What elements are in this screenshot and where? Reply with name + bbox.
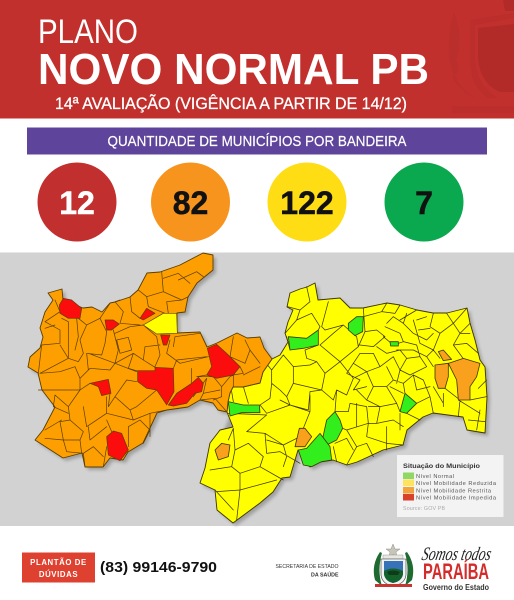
footer: helpline badge: DÚVIDAS <box>39 570 78 579</box>
counter: orange flag: 82 <box>173 185 208 221</box>
footer: health department <box>276 564 339 578</box>
footer: health department: SECRETARIA DE ESTADO <box>276 564 338 570</box>
footer: Somos todos Paraiba logo: Governo do Estado <box>423 583 489 592</box>
footer: phone number: (83) 99146-9790 <box>100 560 217 576</box>
green municipalities <box>228 317 417 467</box>
counter: orange flag <box>151 162 230 242</box>
legend swatches <box>403 472 414 500</box>
footer: helpline badge <box>22 552 95 582</box>
legend labels <box>416 474 497 501</box>
red municipalities <box>59 298 240 461</box>
counter: red flag: 12 <box>59 185 95 221</box>
legend: Source: GOV PB <box>403 506 445 512</box>
municipalities map <box>28 253 487 523</box>
section heading bar <box>27 128 487 154</box>
west region: orange municipalities <box>28 253 272 467</box>
map shadow <box>31 256 490 526</box>
legend labels: Nível Mobilidade Reduzida <box>416 481 497 487</box>
counter: green flag <box>384 162 464 242</box>
legend: Situação do Município <box>403 463 480 470</box>
orange municipalities in the east <box>215 350 480 460</box>
title large: NOVO NORMAL PB <box>38 45 429 94</box>
footer: helpline badge: PLANTÃO DE <box>30 558 87 567</box>
counter: green flag: 7 <box>415 185 433 221</box>
watermark coat of arms <box>449 0 514 113</box>
west municipal boundaries <box>38 272 260 467</box>
legend labels: Nível Mobilidade Restrita <box>416 488 492 494</box>
map panel <box>0 252 514 526</box>
title small: PLANO <box>38 13 138 51</box>
footer: state coat of arms <box>374 544 413 587</box>
east municipal boundaries <box>210 287 487 520</box>
legend labels: Nível Mobilidade Impedida <box>416 495 497 501</box>
east region: yellow municipalities <box>200 283 487 523</box>
header band <box>0 0 514 118</box>
legend labels: Nível Normal <box>416 474 454 480</box>
footer: health department: DA SAÚDE <box>311 572 339 578</box>
footer: Somos todos Paraiba logo <box>420 544 493 592</box>
legend <box>397 455 504 517</box>
counter: red flag <box>38 162 116 242</box>
section heading bar: QUANTIDADE DE MUNICÍPIOS POR BANDEIRA <box>108 133 407 150</box>
counter: yellow flag: 122 <box>280 185 334 221</box>
subtitle: 14ª AVALIAÇÃO (VIGÊNCIA A PARTIR DE 14/12) <box>55 93 407 113</box>
counter: yellow flag <box>268 162 346 242</box>
